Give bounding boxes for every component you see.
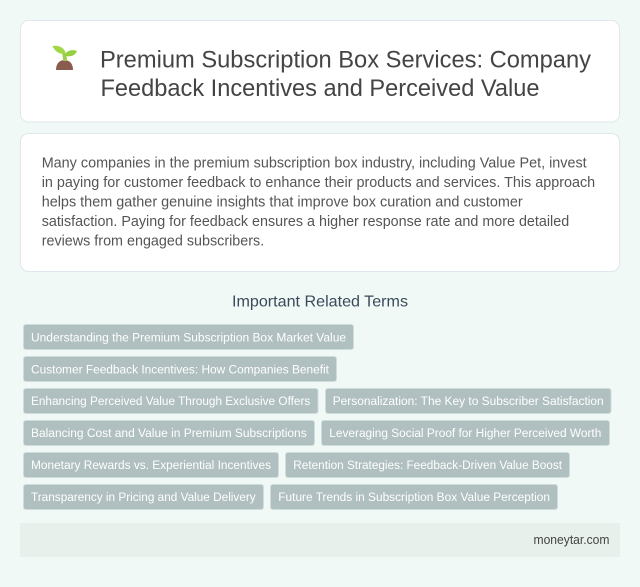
- intro text: Many companies in the premium subscription box industry, including Value Pet, invest: [42, 156, 587, 172]
- title: Premium Subscription Box Services: Company: [100, 46, 591, 74]
- intro text: in paying for customer feedback to enhance their products and services. This approach: [42, 175, 595, 191]
- intro text: satisfaction. Paying for feedback ensures a higher response rate and more detailed: [42, 214, 569, 230]
- tag: [24, 324, 354, 350]
- tag: [24, 388, 318, 414]
- tag: Transparency in Pricing and Value Delivery: [31, 490, 257, 504]
- intro text: reviews from engaged subscribers.: [42, 234, 264, 250]
- tag: [24, 356, 336, 382]
- panel: title card: [20, 20, 620, 122]
- tag: Customer Feedback Incentives: How Companies Benefit: [31, 362, 330, 376]
- footer source: moneytar.com: [534, 533, 610, 547]
- intro text: [42, 156, 595, 250]
- tag: [24, 452, 278, 478]
- icon: seedling: [52, 46, 77, 70]
- tag: [286, 452, 570, 478]
- tag: [326, 388, 611, 414]
- tag: Personalization: The Key to Subscriber Satisfaction: [333, 394, 604, 408]
- tag: [24, 420, 314, 446]
- tag: Future Trends in Subscription Box Value Perception: [278, 490, 550, 504]
- tag: Monetary Rewards vs. Experiential Incentives: [31, 458, 271, 472]
- tag: Retention Strategies: Feedback-Driven Value Boost: [293, 458, 563, 472]
- panel: intro paragraph card: [20, 134, 620, 272]
- tag list: [24, 324, 611, 510]
- heading: related terms: Important Related Terms: [232, 294, 408, 310]
- title: [100, 46, 591, 102]
- tag: Enhancing Perceived Value Through Exclusive Offers: [31, 394, 310, 408]
- tag: [24, 484, 264, 510]
- tag: Understanding the Premium Subscription Box Market Value: [31, 330, 346, 344]
- tag: Leveraging Social Proof for Higher Perceived Worth: [329, 426, 601, 440]
- tag: [322, 420, 610, 446]
- title: Feedback Incentives and Perceived Value: [100, 75, 540, 102]
- intro text: helps them gather genuine insights that improve box curation and customer: [42, 194, 523, 210]
- tag: Balancing Cost and Value in Premium Subscriptions: [31, 426, 307, 440]
- tag: [270, 484, 558, 510]
- footer: [20, 523, 620, 557]
